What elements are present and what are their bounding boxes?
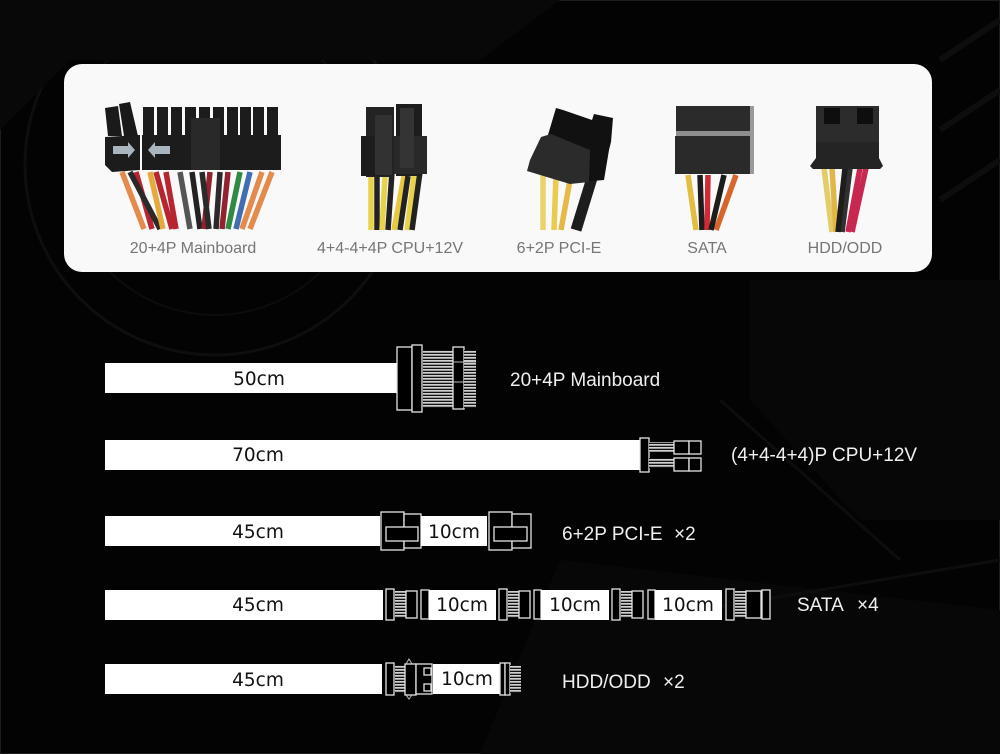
icon: 20+4P mainboard connector: [105, 102, 281, 229]
icon: HDD/ODD connector: [810, 106, 883, 232]
icon: SATA connector: [675, 106, 754, 230]
label: 6+2P PCI-E: [562, 524, 663, 545]
cable: SATA: 45cm: [232, 595, 284, 616]
captions: 6+2P PCI-E: [517, 240, 601, 257]
cable: SATA: ×4: [857, 595, 879, 616]
label: SATA: [797, 595, 844, 616]
captions: 4+4-4+4P CPU+12V: [317, 240, 463, 257]
cable: PCI-E: 45cm: [232, 522, 284, 543]
label: 20+4P Mainboard: [510, 370, 660, 391]
cable: HDD/ODD: 10cm: [441, 669, 493, 690]
captions: HDD/ODD: [808, 240, 882, 257]
cable: HDD/ODD: [105, 659, 685, 699]
cable: HDD/ODD: ×2: [663, 672, 685, 693]
cable: SATA: 10cm: [549, 595, 601, 616]
captions: SATA: [687, 240, 727, 257]
label: (4+4-4+4)P CPU+12V: [731, 445, 917, 466]
label: HDD/ODD: [562, 672, 651, 693]
cable: PCI-E: [105, 512, 696, 550]
cable: SATA: 10cm: [436, 595, 488, 616]
icon: PCI-E connector: [527, 108, 613, 230]
cable: 20+4P mainboard: [105, 345, 660, 412]
captions: [130, 240, 882, 257]
cable: CPU: 70cm: [232, 445, 284, 466]
cable: SATA: [105, 589, 879, 620]
cable: PCI-E: ×2: [674, 524, 696, 545]
cable: 20+4P mainboard: 50cm: [233, 369, 285, 390]
cable: CPU: [105, 438, 917, 472]
cable: SATA: 10cm: [662, 595, 714, 616]
panel: connector photos: [64, 64, 932, 272]
cable: HDD/ODD: 45cm: [232, 670, 284, 691]
cable: PCI-E: 10cm: [428, 522, 480, 543]
captions: 20+4P Mainboard: [130, 240, 256, 257]
icon: CPU connector: [361, 104, 427, 230]
